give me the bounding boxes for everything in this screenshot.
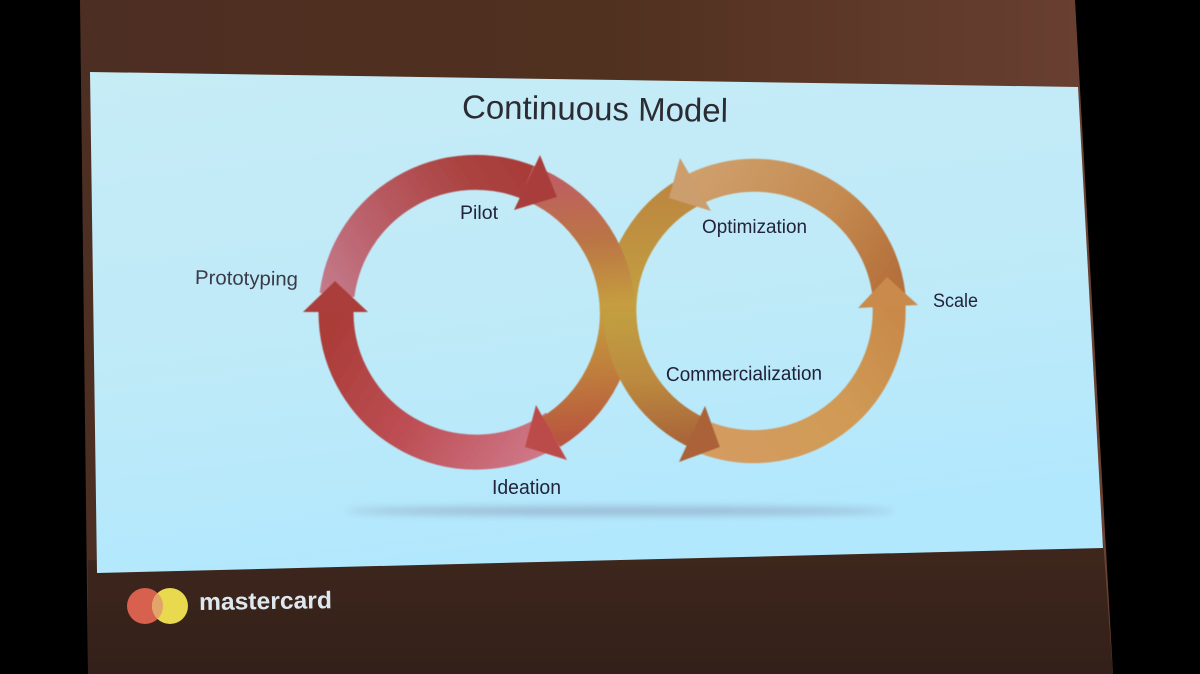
arrowhead: scale bbox=[858, 277, 918, 308]
icon: overlapping circles bbox=[127, 588, 188, 624]
drop shadow under the diagram bbox=[345, 507, 895, 515]
label: Ideation: Ideation bbox=[492, 477, 561, 499]
label: Prototyping: Prototyping bbox=[195, 267, 298, 291]
label: Scale: Scale bbox=[933, 291, 978, 312]
projected slide panel bbox=[90, 72, 1103, 573]
left ring: pilot to ideation arc bbox=[525, 182, 617, 460]
right ring: optimization to commercialization arc bbox=[620, 189, 700, 434]
crossing overlap, left ring on top bbox=[534, 172, 632, 312]
label: Commercialization: Commercialization bbox=[666, 363, 822, 386]
arrowhead: commercialization bbox=[679, 406, 720, 462]
infinity loop diagram bbox=[303, 155, 918, 462]
left ring: ideation to prototyping arc bbox=[336, 312, 556, 452]
wordmark: mastercard bbox=[199, 587, 332, 616]
title: Continuous Model bbox=[462, 88, 728, 129]
arrowhead: prototyping bbox=[303, 281, 368, 312]
right ring: scale to optimization arc bbox=[669, 158, 889, 295]
mastercard logo bbox=[127, 587, 332, 624]
left ring: prototyping to pilot arc bbox=[337, 155, 557, 295]
right ring: commercialization to scale arc bbox=[706, 305, 889, 447]
label: Optimization: Optimization bbox=[702, 217, 807, 238]
label: Pilot: Pilot bbox=[460, 203, 499, 224]
